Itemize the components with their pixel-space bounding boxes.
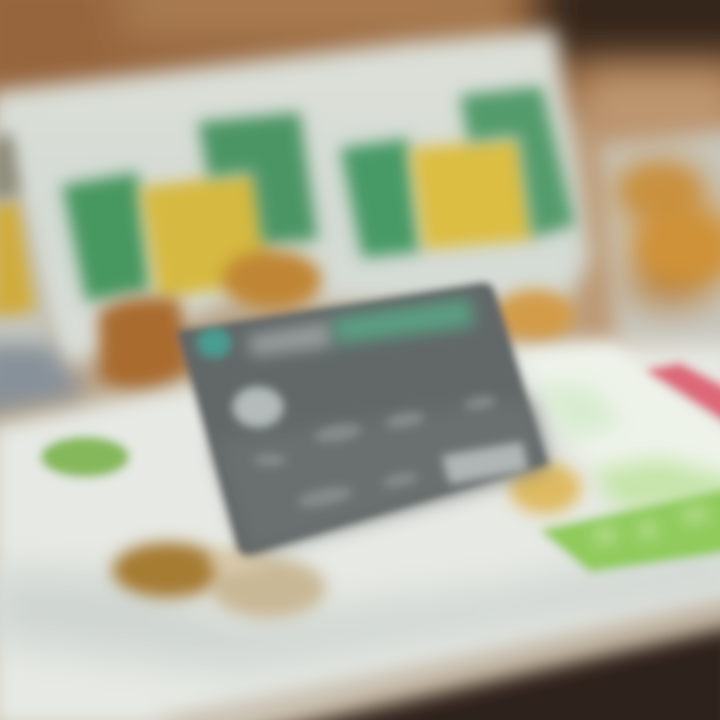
receipt: red strip	[645, 363, 720, 432]
table rim highlight	[150, 600, 720, 720]
card teal logo	[197, 328, 231, 358]
main chart sheet	[0, 30, 590, 370]
coins in front	[112, 542, 326, 618]
bar: green 4	[460, 86, 575, 238]
card lower tone	[215, 400, 548, 552]
coins behind card	[98, 250, 575, 388]
left chart sheet	[0, 130, 85, 415]
coin: top	[222, 250, 322, 310]
right receipts	[520, 345, 720, 572]
receipt: green note	[540, 486, 720, 572]
background chart sheet, right	[600, 130, 720, 365]
coin pile, right	[615, 162, 720, 305]
green spot on table	[41, 437, 129, 477]
receipt: pale green band	[590, 458, 720, 510]
bar: green 2	[198, 112, 318, 245]
table surface	[0, 340, 720, 720]
receipt: white sheet	[520, 345, 720, 490]
bar: yellow 1	[140, 172, 272, 300]
bar chart	[62, 86, 575, 302]
card number marks	[254, 394, 497, 511]
coin beside card	[509, 462, 581, 514]
table shading	[0, 540, 720, 670]
card chip	[233, 387, 283, 427]
coin: flat bronze	[112, 542, 224, 598]
coin: left stack	[98, 297, 190, 388]
card title pale text	[248, 322, 332, 356]
card title green text	[332, 298, 474, 344]
bar: green 3	[340, 138, 420, 258]
receipt: note marks	[593, 507, 709, 544]
credit card	[176, 282, 550, 556]
receipt: pale green marks	[535, 385, 625, 440]
bar: green 1	[62, 172, 150, 302]
card body	[176, 282, 550, 556]
bar: yellow 2	[410, 138, 534, 250]
coin: right	[495, 289, 575, 341]
card bright label	[442, 442, 528, 484]
table dark front edge	[190, 622, 720, 720]
coin: pale stack	[210, 558, 326, 618]
